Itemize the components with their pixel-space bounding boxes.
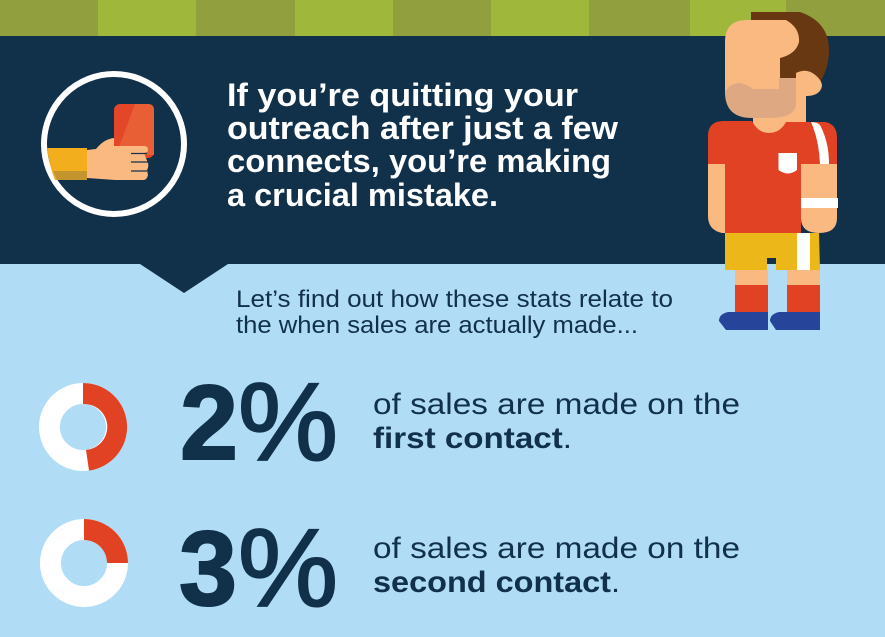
badge [778,153,797,174]
stat text: first contact: first contact . [373,422,572,455]
heading [227,77,618,213]
arms [708,164,725,233]
stat text: second contact: second contact . [373,566,620,599]
stat: 2%: 2 [180,364,238,482]
sleeve stripe [811,122,829,164]
intro text: the when sales are actually made... [236,312,638,339]
soccer player [708,12,838,330]
stat: 2%: % [238,361,338,484]
stat: 3%: % [238,507,338,630]
boots [719,312,768,330]
shirt [708,121,837,233]
shorts [725,233,820,270]
stat: 3% [179,507,338,630]
icon: hand holding red card [44,74,184,214]
stat text: second contact [373,532,740,599]
stat text: first contact: of sales are made on the [373,388,740,421]
stat text: first contact [373,388,740,455]
intro text [236,286,673,339]
neck and ear [753,95,806,136]
donut chart: 3% row [50,519,128,596]
heading: outreach after just a few [227,110,618,146]
legs [735,270,768,285]
hair [751,12,829,82]
stat: 3%: 3 [179,510,237,628]
face [725,20,799,95]
heading: connects, you’re making [227,143,611,179]
heading: a crucial mistake. [227,177,498,213]
stat: 2% [180,361,338,484]
navy header panel [0,36,885,293]
beard [725,78,796,118]
donut chart: 2% row [50,383,127,471]
stat text: second contact: of sales are made on the [373,532,740,565]
grass stripes [0,0,885,36]
heading: If you’re quitting your [227,77,578,113]
intro text: Let’s find out how these stats relate to [236,286,673,313]
